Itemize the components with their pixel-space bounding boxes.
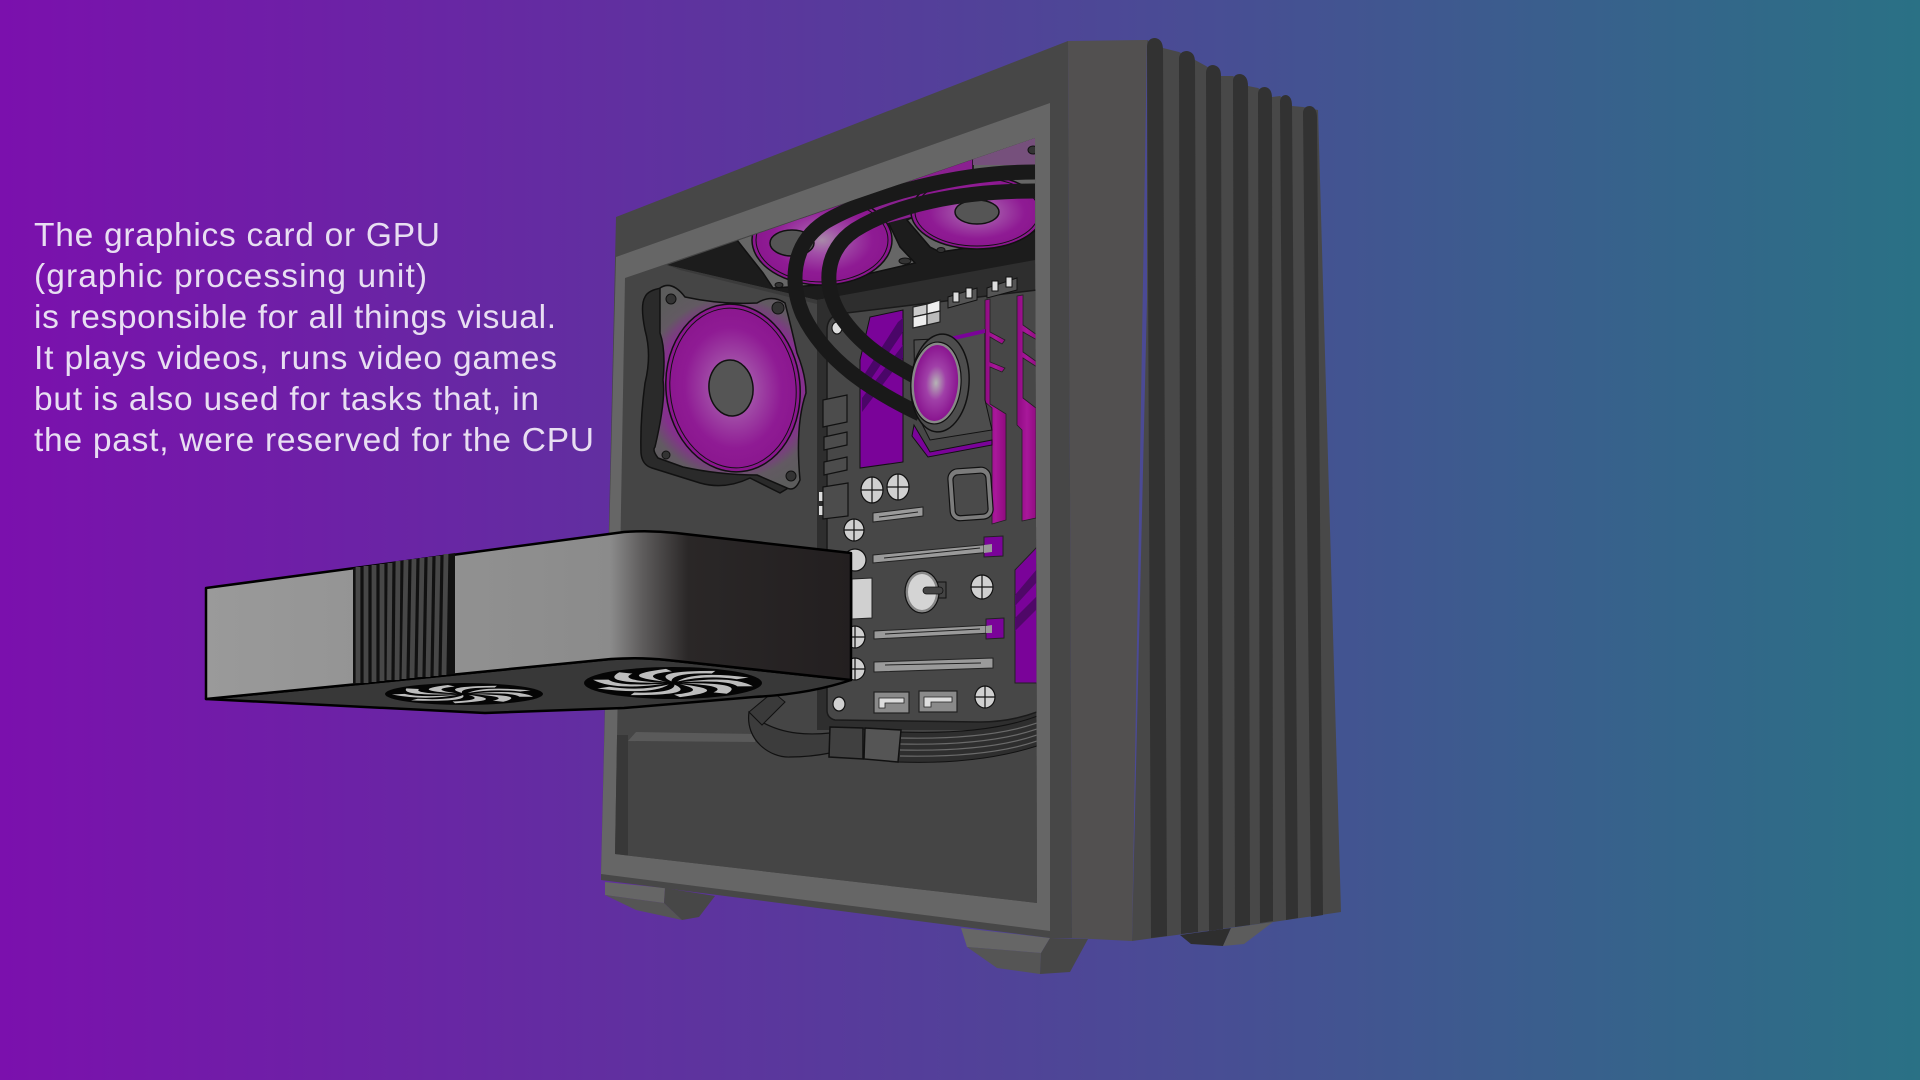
- CMOS battery: [905, 571, 946, 613]
- top of case wedge with fans: [667, 130, 1043, 300]
- motherboard: [827, 290, 1037, 722]
- case interior: [600, 130, 1050, 920]
- power cables: [829, 715, 1040, 762]
- GPU front face: [206, 531, 851, 699]
- side fan: [641, 285, 808, 493]
- GPU heatsink fins: [353, 553, 455, 684]
- case floor panel: [615, 732, 1040, 910]
- case feet: [605, 882, 1273, 974]
- explanatory text block: but is also used for tasks that, in: [34, 381, 539, 418]
- RAM slots: [985, 295, 1037, 524]
- explanatory text block: the past, were reserved for the CPU: [34, 422, 594, 459]
- explanatory text block: (graphic processing unit): [34, 258, 427, 295]
- top fan left: [737, 158, 976, 288]
- top fan right: [906, 138, 1035, 253]
- white board oval: [832, 322, 842, 334]
- case front column: [1068, 40, 1147, 941]
- explanatory text block: is responsible for all things visual.: [34, 299, 556, 336]
- CPU pump cap: [908, 332, 972, 434]
- explanatory text block: [34, 217, 594, 459]
- CPU pump block: [912, 329, 992, 457]
- case top bevel and inner trim: [601, 41, 1072, 938]
- motherboard back band: [817, 260, 1037, 730]
- light front frame: [601, 103, 1050, 931]
- left connectors: [823, 395, 848, 519]
- socket bracket: [947, 467, 994, 521]
- GPU underside: [206, 658, 851, 713]
- explanatory text block: It plays videos, runs video games: [34, 340, 557, 377]
- white chip grid: [913, 300, 940, 328]
- M.2 purple heatsink: [860, 310, 903, 468]
- interior back wall: [600, 130, 1050, 920]
- white IO block: [852, 578, 872, 619]
- GPU fan left: [385, 683, 543, 705]
- coolant tubes: [795, 172, 1035, 414]
- back-plate tabs: [819, 492, 822, 515]
- case side fins: [1132, 38, 1341, 941]
- explanatory text block: The graphics card or GPU: [34, 217, 440, 254]
- PCIe slots: [873, 536, 1004, 672]
- GPU fan right: [584, 667, 762, 699]
- PC case: [600, 38, 1341, 974]
- SATA ports: [874, 691, 957, 713]
- small M.2 slot: [873, 507, 923, 522]
- board screws: [833, 474, 995, 711]
- loop cable: [749, 692, 830, 757]
- chipset purple heatsink: [1015, 547, 1037, 683]
- side wall corner line: [667, 265, 817, 304]
- fan headers: [948, 277, 1017, 308]
- graphics card: [206, 531, 851, 713]
